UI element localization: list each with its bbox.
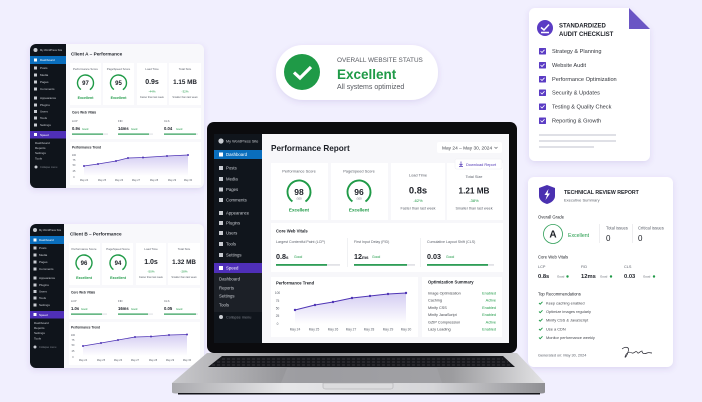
grade badge: A xyxy=(549,230,557,240)
metric cards: Client A: -44% xyxy=(148,90,156,94)
panel: technical review report: Overall Grade xyxy=(538,214,565,220)
status pill: overall website status: All systems optimized xyxy=(337,84,404,91)
trend chart: Client A: 100 xyxy=(72,154,77,157)
sidebar: Client A xyxy=(30,48,66,169)
gauge: performance score: Excellent xyxy=(289,208,310,212)
trend chart: main: 50 xyxy=(276,306,279,310)
metric cards: main: PageSpeed Score xyxy=(343,168,375,174)
metric cards: Client B: 96 xyxy=(81,261,88,267)
sidebar: Client A: Media xyxy=(40,73,49,77)
icon: shield xyxy=(539,185,555,204)
status pill: overall website status: OVERALL WEBSITE STATUS xyxy=(337,57,423,64)
heading: Client A: Client A – Performance xyxy=(71,52,123,56)
metric cards: Client A: 97 xyxy=(82,81,89,87)
trend chart: Client A: May 25 xyxy=(98,179,107,182)
optimization summary: Active xyxy=(486,320,496,324)
optimization summary: Enabled xyxy=(482,292,496,296)
panel: Client B performance xyxy=(30,224,204,368)
metric cards: main: Performance Score xyxy=(282,168,316,174)
metric cards: main: Faster than last week xyxy=(400,206,436,210)
trend chart: Client A: Performance Trend xyxy=(72,146,101,150)
optimization summary: Enabled xyxy=(482,313,496,317)
sidebar: Client A: Speed xyxy=(40,133,49,137)
trend chart: Client B: May 29 xyxy=(166,359,175,362)
sidebar: Client A: Collapse menu xyxy=(40,165,58,169)
gauge: performance score: /100 xyxy=(296,196,302,200)
trend chart: Client A: May 26 xyxy=(115,179,124,182)
checklist items: Performance Optimization xyxy=(552,77,617,83)
vitals row: 0.03 xyxy=(624,274,636,280)
download button xyxy=(455,159,502,169)
core web vitals: Client B: FID xyxy=(118,299,123,303)
trend chart: Client B: May 27 xyxy=(131,359,140,362)
trend chart: Client A: 0 xyxy=(73,176,75,179)
trend chart: main: May 24 xyxy=(290,328,300,332)
trend chart: main: May 25 xyxy=(309,328,319,332)
core web vitals: Client A: Good xyxy=(82,127,89,131)
sidebar: Client B: Posts xyxy=(39,246,47,250)
vitals row: FID xyxy=(581,265,587,269)
checklist items xyxy=(539,48,617,124)
trend chart: Client B: May 28 xyxy=(149,359,158,362)
core web vitals: Client A: 0.9s xyxy=(72,126,81,131)
sidebar: main dashboard: Settings xyxy=(219,294,235,298)
trend chart: Client A: 25 xyxy=(73,170,76,173)
sidebar: main dashboard: Speed xyxy=(226,266,239,270)
metric cards: Client A xyxy=(70,63,201,105)
core web vitals: Client A xyxy=(70,108,201,139)
trend chart: Client A xyxy=(70,142,201,185)
metric cards: Client B: -50% xyxy=(147,270,155,274)
sidebar: Client B: Comments xyxy=(39,267,54,271)
trend chart: Client B: 100 xyxy=(71,334,76,337)
trend chart: main: 100 xyxy=(275,291,280,295)
trend chart: Client B: May 24 xyxy=(79,359,88,362)
metric cards: main: 0.8s xyxy=(409,184,427,196)
metric cards: Client B: Excellent xyxy=(110,276,127,280)
panel: technical review report: Total issues xyxy=(606,226,628,230)
optimization summary: Lazy Loading xyxy=(428,328,451,332)
sidebar: main dashboard: Dashboard xyxy=(219,276,241,282)
metric cards: Client A: Excellent xyxy=(111,96,127,100)
sidebar: Client B xyxy=(30,228,64,349)
sidebar: Client A: Tools xyxy=(35,157,43,161)
metric cards: Client B xyxy=(69,243,200,285)
sidebar: main dashboard: Collapse menu xyxy=(226,315,251,319)
optimization summary xyxy=(422,277,502,337)
core web vitals: Client A: Good xyxy=(131,127,138,131)
metric cards: Client B: 1.0s xyxy=(144,259,158,266)
metric cards: Client B: Smaller than last week xyxy=(171,276,197,279)
metric cards: Client B: Total Size xyxy=(178,247,191,251)
sidebar: Client B: Reports xyxy=(34,326,45,330)
sidebar: main dashboard: Tools xyxy=(219,302,229,308)
trend chart: Client A: May 28 xyxy=(150,179,159,182)
sidebar: Client A: Posts xyxy=(40,66,48,70)
metric cards: Client A: 95 xyxy=(115,81,122,87)
vitals row: Good xyxy=(600,274,608,278)
sidebar: Client B: Settings xyxy=(34,331,45,335)
recommendations list: Minify CSS & JavaScript xyxy=(546,317,589,322)
core web vitals: main: Good xyxy=(372,255,380,259)
optimization summary: Minify JavaScript xyxy=(428,313,458,317)
metric cards: Client B: 94 xyxy=(115,261,122,267)
heading: Client B: Client B – Performance xyxy=(70,232,122,236)
sidebar: Client A: Reports xyxy=(35,146,46,150)
core web vitals: Client B: LCP xyxy=(71,299,77,303)
icon: checklist badge xyxy=(537,20,553,36)
sidebar: Client B: Tools xyxy=(34,337,42,341)
trend chart: Client B: 25 xyxy=(72,350,75,353)
trend chart: main: Performance Trend xyxy=(276,280,315,286)
metric cards: Client A: Performance Score xyxy=(73,67,98,71)
core web vitals: main: 12ms xyxy=(354,252,369,261)
sidebar: Client A: Dashboard xyxy=(40,58,55,62)
core web vitals: main: First Input Delay (FID) xyxy=(354,240,389,244)
vitals row: 0.8s xyxy=(538,274,549,280)
sidebar: Client B: Settings xyxy=(39,303,50,307)
core web vitals: main: Core Web Vitals xyxy=(276,228,308,234)
gauge: performance score xyxy=(283,176,315,212)
trend chart: Client B: Performance Trend xyxy=(71,326,100,330)
download button: Download Report xyxy=(466,162,497,167)
metric cards: Client A: PageSpeed Score xyxy=(107,67,131,71)
sidebar: main dashboard: My WordPress Site xyxy=(226,139,258,143)
heading: Performance Report: Performance Report xyxy=(271,144,350,153)
core web vitals: main: 0.03 xyxy=(427,252,441,261)
sidebar: Client B: Appearance xyxy=(39,276,56,280)
trend chart: Client B: 75 xyxy=(72,339,75,342)
panel: standardized audit checklist xyxy=(529,8,650,161)
metric cards: Client B: PageSpeed Score xyxy=(106,247,130,251)
core web vitals: Client B: CLS xyxy=(164,299,170,303)
icon: green check xyxy=(284,54,320,90)
sidebar: main dashboard: Users xyxy=(226,230,237,236)
trend chart: Client A: May 30 xyxy=(184,179,193,182)
metric cards: main: 1.21 MB xyxy=(459,186,490,196)
metric cards: Client A: 1.15 MB xyxy=(173,79,197,86)
recommendations list: Use a CDN xyxy=(546,326,566,331)
trend chart: Client A: 75 xyxy=(73,159,76,162)
panel: technical review report: 0 xyxy=(606,234,611,243)
core web vitals: Client B: 1.0s xyxy=(71,306,80,311)
panel: technical review report: Generated on: May 30, 2024 xyxy=(538,354,586,358)
metric cards: Client A: Total Size xyxy=(179,67,192,71)
sidebar: main dashboard: Posts xyxy=(226,166,237,170)
core web vitals: Client B: 0.05 xyxy=(164,306,173,311)
metric cards: Client A: Load Time xyxy=(145,67,159,71)
sidebar: main dashboard: Tools xyxy=(226,242,236,246)
trend chart: main: May 26 xyxy=(328,328,338,332)
metric cards: Client A: -32% xyxy=(181,90,189,94)
core web vitals: Client A: Core Web Vitals xyxy=(72,110,96,114)
core web vitals: Client A: FID xyxy=(118,119,123,123)
core web vitals: Client B xyxy=(69,288,200,319)
optimization summary: Minify CSS xyxy=(428,306,447,310)
core web vitals: Client A: Good xyxy=(176,127,183,131)
trend chart: Client A: May 27 xyxy=(132,179,141,182)
trend chart: Client B xyxy=(69,322,200,365)
laptop base xyxy=(172,353,545,394)
sidebar: Client A: Users xyxy=(40,110,48,114)
core web vitals: Client A: CLS xyxy=(164,119,170,123)
checklist items: Website Audit xyxy=(552,63,587,69)
trend chart: main: 0 xyxy=(277,322,279,326)
date picker: May 24 – May 30, 2024 xyxy=(442,146,492,152)
core web vitals: Client B: Good xyxy=(81,307,88,311)
recommendations list: Optimize images regularly xyxy=(546,309,591,314)
checklist items: Testing & Quality Check xyxy=(552,104,612,110)
sidebar: Client B: My WordPress Site xyxy=(39,228,62,232)
trend chart: main xyxy=(271,277,418,337)
metric cards: Client A: 0.9s xyxy=(145,79,159,86)
core web vitals: main: 0.8s xyxy=(276,252,289,261)
recommendations list: Keep caching enabled xyxy=(546,300,585,305)
metric cards: main: Total Size xyxy=(466,174,482,179)
vitals row: 12ms xyxy=(581,274,596,280)
optimization summary: Enabled xyxy=(482,328,496,332)
vitals row: CLS xyxy=(624,265,632,269)
vitals row: Good xyxy=(643,274,651,278)
metric cards: main: Load Time xyxy=(409,172,427,178)
trend chart: Client A: May 29 xyxy=(168,179,177,182)
grade badge xyxy=(544,224,590,244)
sidebar: Client B: Tools xyxy=(39,296,47,300)
optimization summary: Optimization Summary xyxy=(428,280,474,284)
trend chart: Client A: 50 xyxy=(73,164,76,167)
metric cards: Client B: Excellent xyxy=(76,276,93,280)
metric cards: Client A: Faster than last week xyxy=(140,96,165,99)
panel: technical review report: Core Web Vitals xyxy=(538,254,568,260)
gauge: performance score: 98 xyxy=(294,187,304,197)
optimization summary: GZIP Compression xyxy=(428,320,460,324)
sidebar: Client A: Comments xyxy=(40,87,55,91)
sidebar: Client B: Pages xyxy=(39,260,48,264)
gauge: pagespeed score: 96 xyxy=(354,187,364,197)
sidebar: Client A: Settings xyxy=(40,123,51,127)
trend chart: main: 25 xyxy=(276,314,279,318)
status pill: overall website status xyxy=(276,45,438,100)
core web vitals: Client B: Good xyxy=(176,307,183,311)
optimization summary: Enabled xyxy=(482,306,496,310)
sidebar: main dashboard: Reports xyxy=(219,286,234,290)
sidebar: main dashboard: Pages xyxy=(226,187,238,192)
core web vitals: main: Good xyxy=(446,255,454,259)
sidebar: main dashboard: Plugins xyxy=(226,220,240,226)
laptop xyxy=(172,122,545,394)
optimization summary: Caching xyxy=(428,298,442,302)
metric cards: Client B: Faster than last week xyxy=(139,276,164,279)
sidebar: main dashboard: Media xyxy=(226,176,238,182)
panel: technical review report: Executive Summary xyxy=(564,198,600,202)
core web vitals: main: Good xyxy=(294,255,302,259)
sidebar: Client B: Dashboard xyxy=(34,321,49,325)
metric cards: Client B: -28% xyxy=(180,270,188,274)
trend chart: main: May 27 xyxy=(346,328,356,332)
sidebar: Client B: Speed xyxy=(39,313,48,317)
panel: technical review report xyxy=(528,177,673,367)
trend chart: Client B: 50 xyxy=(72,344,75,347)
grade badge: Excellent xyxy=(568,233,590,239)
panel: Client A performance xyxy=(30,44,204,188)
sidebar: Client B: Users xyxy=(39,290,47,294)
date picker xyxy=(437,142,502,153)
sidebar: main dashboard: Dashboard xyxy=(226,152,248,157)
panel: technical review report: Critical issues xyxy=(638,226,664,230)
checklist items: Strategy & Planning xyxy=(552,49,601,55)
metric cards: main xyxy=(271,163,503,220)
signature xyxy=(622,347,652,357)
sidebar: Client A: Settings xyxy=(35,151,46,155)
sidebar: main dashboard xyxy=(214,134,262,343)
gauge: pagespeed score: Excellent xyxy=(349,208,370,212)
metric cards: Client B: Performance Score xyxy=(72,247,97,251)
sidebar: main dashboard: Settings xyxy=(226,252,242,258)
sidebar: Client A: My WordPress Site xyxy=(40,48,63,52)
vitals row: Good xyxy=(557,274,565,278)
metric cards: Client A: Smaller than last week xyxy=(172,96,198,99)
core web vitals: main xyxy=(271,223,503,272)
metric cards: main: -38% xyxy=(469,198,479,203)
core web vitals: Client A: LCP xyxy=(72,119,78,123)
metric cards: Client B: 1.32 MB xyxy=(172,259,196,266)
sidebar: Client A: Appearance xyxy=(40,96,57,100)
recommendations list: Monitor performance weekly xyxy=(546,335,595,340)
sidebar: Client A: Dashboard xyxy=(35,141,50,145)
core web vitals: Client B: Good xyxy=(131,307,138,311)
trend chart: main: May 29 xyxy=(383,328,393,332)
sidebar: Client A: Pages xyxy=(40,80,49,84)
vitals row: LCP xyxy=(538,265,546,269)
core web vitals: Client B: 16ms xyxy=(118,306,129,311)
trend chart: Client B: May 25 xyxy=(97,359,106,362)
trend chart: Client B: May 26 xyxy=(114,359,123,362)
trend chart: main: May 28 xyxy=(364,328,374,332)
panel: technical review report: 0 xyxy=(638,234,643,243)
sidebar: main dashboard: Appearance xyxy=(226,210,250,216)
metric cards: main: -62% xyxy=(413,198,423,203)
sidebar: Client B: Plugins xyxy=(39,283,49,287)
recommendations list xyxy=(539,300,595,340)
sidebar: Client A: Tools xyxy=(40,116,48,120)
core web vitals: main: Largest Contentful Paint (LCP) xyxy=(276,240,325,244)
gauge: pagespeed score: /100 xyxy=(356,196,362,200)
panel: technical review report: TECHNICAL REVIEW REPORT xyxy=(564,190,640,196)
status pill: overall website status: Excellent xyxy=(337,67,397,82)
trend chart: Client B: May 30 xyxy=(183,359,192,362)
trend chart: main: May 30 xyxy=(401,328,411,332)
core web vitals: Client A: 14ms xyxy=(118,126,129,131)
vitals row xyxy=(538,265,655,280)
trend chart: Client B: 0 xyxy=(72,356,74,359)
icon: page fold xyxy=(629,8,650,29)
laptop lid xyxy=(207,122,517,353)
core web vitals: Client A: 0.04 xyxy=(164,126,173,131)
core web vitals: Client B: Core Web Vitals xyxy=(71,290,95,294)
core web vitals: main: Cumulative Layout Shift (CLS) xyxy=(427,240,475,244)
panel: standardized audit checklist: STANDARDIZED xyxy=(559,24,607,30)
sidebar: Client B: Dashboard xyxy=(39,238,54,242)
metric cards: Client A: Excellent xyxy=(78,96,94,100)
sidebar: Client A: Plugins xyxy=(40,103,50,107)
trend chart: Client A: May 24 xyxy=(80,179,89,182)
trend chart: main: 75 xyxy=(276,299,279,303)
sidebar: Client B: Collapse menu xyxy=(39,345,57,349)
gauge: pagespeed score xyxy=(343,176,375,212)
panel: standardized audit checklist: AUDIT CHECKLIST xyxy=(559,32,614,38)
checklist items: Security & Updates xyxy=(552,90,600,96)
optimization summary: Image Optimization xyxy=(428,292,461,296)
sidebar: main dashboard: Comments xyxy=(226,198,247,202)
optimization summary: Active xyxy=(486,298,496,302)
metric cards: Client B: Load Time xyxy=(144,247,158,251)
sidebar: Client B: Media xyxy=(39,253,48,257)
checklist items: Reporting & Growth xyxy=(552,118,601,124)
panel: technical review report: Top Recommendations xyxy=(538,292,581,296)
metric cards: main: Smaller than last week xyxy=(455,206,493,210)
